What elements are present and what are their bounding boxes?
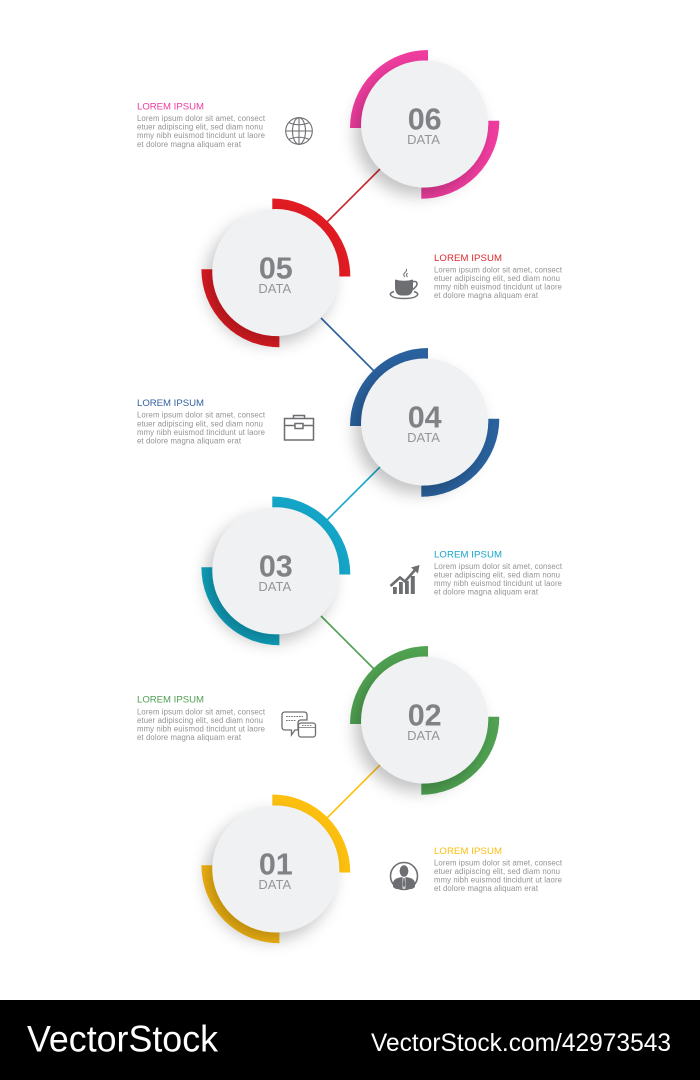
step 03 circle: DATA [258,579,291,594]
text block: step 06 [137,101,266,149]
text block: step 04: mmy nibh euismod tincidunt ut laore [137,428,265,437]
icon: speech bubbles [282,712,316,737]
footer banner [0,1000,700,1080]
text block: step 06: mmy nibh euismod tincidunt ut laore [137,131,265,140]
step 02 circle: 02 [408,698,442,732]
text block: step 05: et dolore magna aliquam erat [434,291,539,300]
icon: businessman [390,862,418,890]
text block: step 05: Lorem ipsum dolor sit amet, consect [434,265,563,274]
text block: step 02: et dolore magna aliquam erat [137,733,242,742]
step 01 circle: DATA [258,877,291,892]
connector: 06 to 05 [322,164,385,227]
connector: 03 to 02 [321,616,378,673]
step 06 circle: DATA [407,132,440,147]
text block: step 04: LOREM IPSUM [137,398,204,409]
step 06 circle [356,56,494,193]
connector: 04 to 03 [322,462,385,525]
step 05 circle: DATA [258,281,291,296]
text block: step 01: Lorem ipsum dolor sit amet, consect [434,858,563,867]
text block: step 06: et dolore magna aliquam erat [137,140,242,149]
text block: step 04 [137,398,266,446]
text block: step 05: mmy nibh euismod tincidunt ut laore [434,282,562,292]
text block: step 03: etuer adipiscing elit, sed diam nonu [434,570,560,579]
text block: step 01: mmy nibh euismod tincidunt ut laore [434,876,562,884]
icon: coffee cup [390,269,418,298]
text block: step 05 [434,253,563,300]
text block: step 04: etuer adipiscing elit, sed diam nonu [137,419,263,428]
text block: step 03: et dolore magna aliquam erat [434,588,539,597]
text block: step 04: Lorem ipsum dolor sit amet, consect [137,411,266,420]
step 01 circle: 01 [259,848,293,882]
text block: step 03 [434,550,563,597]
text block: step 06: Lorem ipsum dolor sit amet, consect [137,114,266,123]
footer image id: VectorStock.com/42973543 [371,1029,671,1057]
text block: step 02: etuer adipiscing elit, sed diam nonu [137,716,263,725]
step 04 circle: DATA [407,430,440,445]
icon: growth chart [390,565,420,594]
step 02 circle: DATA [407,728,440,743]
text block: step 01: et dolore magna aliquam erat [434,884,539,893]
text block: step 01: etuer adipiscing elit, sed diam nonu [434,867,560,876]
connector: 05 to 04 [321,318,378,375]
text block: step 03: mmy nibh euismod tincidunt ut laore [434,579,562,588]
step 04 circle: 04 [408,400,442,434]
text block: step 02: LOREM IPSUM [137,695,204,706]
text block: step 04: et dolore magna aliquam erat [137,436,242,446]
text block: step 02: mmy nibh euismod tincidunt ut laore [137,724,265,734]
text block: step 02: Lorem ipsum dolor sit amet, consect [137,707,266,716]
text block: step 02 [137,695,266,742]
step 03 circle [207,502,345,640]
text block: step 06: LOREM IPSUM [137,101,204,112]
text block: step 03: LOREM IPSUM [434,550,502,560]
text block: step 05: LOREM IPSUM [434,253,502,264]
icon: briefcase [284,416,314,440]
text block: step 01: LOREM IPSUM [434,846,502,857]
step 03 circle: 03 [259,550,293,584]
text block: step 06: etuer adipiscing elit, sed diam nonu [137,123,263,132]
text block: step 05: etuer adipiscing elit, sed diam nonu [434,274,560,283]
connector: 02 to 01 [322,760,385,823]
icon: globe [286,118,312,144]
step 05 circle: 05 [259,252,293,286]
text block: step 03: Lorem ipsum dolor sit amet, consect [434,562,563,571]
text block: step 01 [434,846,563,893]
step 06 circle: 06 [408,102,442,136]
footer logo text: VectorStock [27,1018,218,1060]
step 05 circle [207,204,345,342]
step 04 circle [356,354,494,491]
step 01 circle [207,800,345,938]
step 02 circle [356,652,494,789]
